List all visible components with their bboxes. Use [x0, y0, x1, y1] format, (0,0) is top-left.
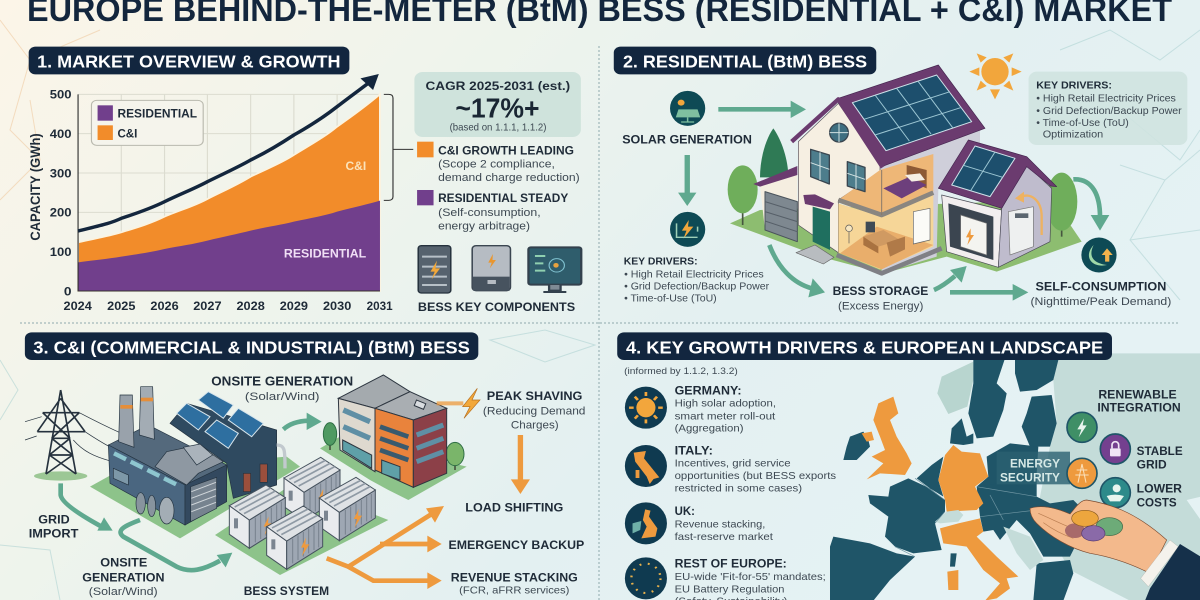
panel: market overview and growth: [27, 47, 581, 314]
icon: EU stars: [625, 557, 667, 599]
arrow: home to BESS storage: [769, 245, 825, 297]
panel: residential BESS: [614, 47, 1187, 312]
area chart: capacity by segment: 500: [50, 88, 72, 101]
icon: battery drivers: [670, 212, 705, 247]
chart legend: C&I: [117, 126, 137, 140]
text block: key drivers left: KEY DRIVERS:: [624, 256, 698, 267]
label: grid import: GRID: [38, 512, 70, 526]
area chart: capacity by segment: 2030: [323, 299, 351, 313]
arrow: storage to house: [934, 266, 967, 290]
label: BESS key components: BESS KEY COMPONENTS: [418, 300, 576, 314]
label: lower costs: COSTS: [1137, 496, 1177, 510]
heading: residential: [614, 47, 876, 74]
bracket connector: [384, 94, 413, 200]
label: stable grid: STABLE: [1137, 444, 1183, 458]
text block: Germany: High solar adoption,: [675, 398, 776, 409]
chart legend: RESIDENTIAL: [117, 107, 197, 120]
label: energy security: SECURITY: [1000, 470, 1061, 484]
note: informed by: (informed by 1.1.2, 1.3.2): [624, 367, 738, 377]
area chart: capacity by segment: C&I: [346, 159, 366, 173]
area chart: capacity by segment: RESIDENTIAL: [284, 246, 366, 260]
icon: peak shaving bolt: [437, 388, 480, 418]
text block: rest of Europe: REST OF EUROPE:: [675, 557, 787, 570]
area chart: capacity by segment: 2025: [107, 299, 135, 313]
callout: key drivers right: • Time-of-Use (ToU): [1036, 118, 1129, 129]
label: grid import: IMPORT: [29, 527, 79, 540]
text block: Germany: [675, 384, 776, 434]
label: load shifting: LOAD SHIFTING: [465, 501, 563, 514]
label: stable grid: [1137, 444, 1183, 472]
illustration: house with solar and battery: [728, 65, 1082, 273]
text block: C&I growth: [417, 142, 580, 184]
text block: C&I growth: (Scope 2 compliance,: [438, 157, 555, 170]
illustration: pylon: [25, 390, 120, 481]
callout: key drivers right: [1029, 72, 1187, 145]
text block: rest of Europe: EU-wide 'Fit-for-55' mandates;: [675, 572, 826, 583]
illustration: commercial buildings: [320, 375, 467, 500]
text block: key drivers left: • High Retail Electricity Prices: [624, 269, 764, 280]
arrow: peak shaving to load shifting: [511, 435, 530, 494]
label: peak shaving: PEAK SHAVING: [487, 389, 582, 403]
label: energy security: ENERGY: [1010, 456, 1061, 470]
label: energy security: [997, 452, 1070, 484]
area chart: capacity by segment: 2031: [367, 299, 393, 313]
label: BESS storage: BESS STORAGE: [833, 284, 929, 298]
callout: CAGR: CAGR 2025-2031 (est.): [426, 79, 570, 93]
map of Europe: [830, 353, 1200, 600]
icon: sun: [969, 53, 1022, 99]
label: stable grid: GRID: [1137, 458, 1167, 472]
chart legend: [91, 100, 203, 145]
label: BESS storage: (Excess Energy): [838, 299, 923, 312]
text block: Germany: smart meter roll-out: [675, 411, 775, 422]
label: revenue stacking: [451, 570, 578, 596]
label: onsite generation bottom: (Solar/Wind): [89, 585, 158, 598]
label: self-consumption: (Nighttime/Peak Demand): [1030, 295, 1171, 308]
icon: solar generation: [670, 91, 705, 126]
label: onsite generation top: (Solar/Wind): [245, 390, 320, 403]
text block: Italy: [675, 443, 836, 494]
icon: battery rack: [418, 246, 451, 293]
text block: residential steady: (Self-consumption,: [438, 206, 541, 219]
area chart: capacity by segment: 2027: [193, 299, 222, 313]
text block: Italy: restricted in some cases): [675, 483, 802, 494]
icon: inverter: [472, 246, 510, 291]
label: peak shaving: Charges): [511, 418, 559, 431]
label: emergency backup: EMERGENCY BACKUP: [448, 538, 585, 552]
text block: UK: fast-reserve market: [675, 532, 773, 543]
arrow: factory to offices: [283, 413, 322, 430]
area chart: capacity by segment: [27, 74, 393, 313]
text block: key drivers left: [624, 256, 770, 304]
arrow: solar to battery: [678, 155, 696, 206]
label: solar generation: SOLAR GENERATION: [622, 132, 752, 146]
callout: CAGR: (based on 1.1.1, 1.1.2): [450, 122, 546, 133]
label: onsite generation bottom: GENERATION: [82, 571, 165, 584]
label: renewable integration: RENEWABLE: [1098, 387, 1177, 401]
icon: nighttime: [1081, 237, 1117, 272]
callout: CAGR: [414, 72, 581, 137]
callout: key drivers right: • High Retail Electricity Prices: [1036, 93, 1176, 104]
area chart: capacity by segment: 0: [64, 284, 72, 298]
arrow: grid import: [61, 483, 113, 531]
text block: residential steady: [417, 190, 569, 232]
text block: UK: Revenue stacking,: [675, 519, 765, 530]
area chart: capacity by segment: 2026: [150, 299, 179, 313]
text block: C&I growth: demand charge reduction): [438, 171, 580, 184]
text block: key drivers left: • Grid Defection/Backup Power: [624, 281, 770, 292]
label: revenue stacking: (FCR, aFRR services): [459, 585, 569, 596]
heading: market overview: 1. MARKET OVERVIEW & GROWTH: [37, 52, 341, 71]
text block: Italy: opportunities (but BESS exports: [675, 471, 836, 482]
area chart: capacity by segment: 2029: [280, 299, 308, 313]
label: renewable integration: INTEGRATION: [1097, 401, 1181, 415]
text block: UK: UK:: [675, 504, 695, 518]
label: onsite generation top: [211, 375, 353, 403]
label: onsite generation bottom: [82, 556, 165, 598]
label: renewable integration: [1097, 387, 1181, 415]
area chart: capacity by segment: 2028: [236, 299, 265, 313]
text block: Germany: GERMANY:: [675, 384, 742, 397]
text block: rest of Europe: EU Battery Regulation: [675, 584, 784, 595]
label: peak shaving: (Reducing Demand: [483, 404, 585, 417]
arrows: BESS outputs: [327, 506, 444, 589]
area chart: capacity by segment: 400: [50, 127, 72, 141]
illustration: factory: [90, 387, 300, 538]
text block: C&I growth: C&I GROWTH LEADING: [438, 143, 574, 157]
text block: Germany: (Aggregation): [675, 423, 743, 434]
label: peak shaving: [483, 389, 585, 431]
arrow: to moon icon: [1073, 179, 1109, 231]
arrow: solar to home: [718, 101, 806, 118]
label: self-consumption: SELF-CONSUMPTION: [1035, 280, 1166, 293]
label: BESS storage: [833, 284, 929, 312]
icon: Italy: [625, 445, 667, 487]
icon: lower costs: [1100, 478, 1130, 508]
label: grid import: [29, 512, 79, 540]
callout: key drivers right: Optimization: [1043, 129, 1103, 140]
area chart: capacity by segment: 300: [50, 166, 72, 180]
text block: UK: [675, 504, 773, 543]
illustration: BESS containers: [215, 457, 388, 575]
illustration: hand holding coins: [1030, 500, 1200, 600]
panel: growth drivers and landscape: [617, 332, 1200, 600]
text block: rest of Europe: [675, 557, 826, 600]
icon: UK: [625, 502, 667, 544]
icon: renewable integration: [1067, 412, 1097, 442]
label: onsite generation bottom: ONSITE: [100, 556, 148, 569]
label: self-consumption: [1030, 280, 1171, 308]
text block: residential steady: RESIDENTIAL STEADY: [438, 191, 569, 205]
label: lower costs: LOWER: [1137, 482, 1182, 496]
text block: Italy: Incentives, grid service: [675, 458, 791, 469]
callout: key drivers right: • Grid Defection/Backup Power: [1036, 106, 1182, 117]
icon: energy security pylon: [1067, 458, 1097, 488]
arrow: onsite generation to BESS: [121, 520, 232, 570]
callout: key drivers right: KEY DRIVERS:: [1036, 80, 1112, 91]
text block: key drivers left: • Time-of-Use (ToU): [624, 293, 717, 304]
area chart: capacity by segment: 100: [50, 245, 72, 259]
area chart: capacity by segment: 200: [50, 206, 72, 219]
icon: monitor: [528, 247, 581, 292]
arrow: storage to self-consumption: [950, 284, 1028, 301]
label: onsite generation top: ONSITE GENERATION: [211, 375, 353, 388]
area chart: capacity by segment: 2024: [64, 299, 93, 313]
heading: key drivers: [617, 332, 1112, 360]
icon: Germany sun: [625, 387, 667, 429]
text block: Italy: ITALY:: [675, 443, 713, 457]
label: BESS system: BESS SYSTEM: [244, 584, 329, 598]
label: revenue stacking: REVENUE STACKING: [451, 570, 578, 584]
heading: C&I: 3. C&I (COMMERCIAL & INDUSTRIAL) (BtM) BESS: [33, 338, 470, 357]
heading: market overview: [29, 47, 349, 74]
text block: residential steady: energy arbitrage): [438, 219, 530, 232]
label: lower costs: [1137, 482, 1182, 510]
icon: stable grid: [1100, 434, 1130, 464]
callout: CAGR: ~17%+: [455, 93, 540, 124]
heading: C&I: [25, 332, 478, 360]
area chart: capacity by segment: CAPACITY (GWh): [27, 133, 43, 241]
heading: key drivers: 4. KEY GROWTH DRIVERS & EUROPEAN LANDSCAPE: [626, 338, 1103, 357]
panel: C&I BESS: [25, 332, 585, 598]
heading: residential: 2. RESIDENTIAL (BtM) BESS: [623, 52, 867, 71]
